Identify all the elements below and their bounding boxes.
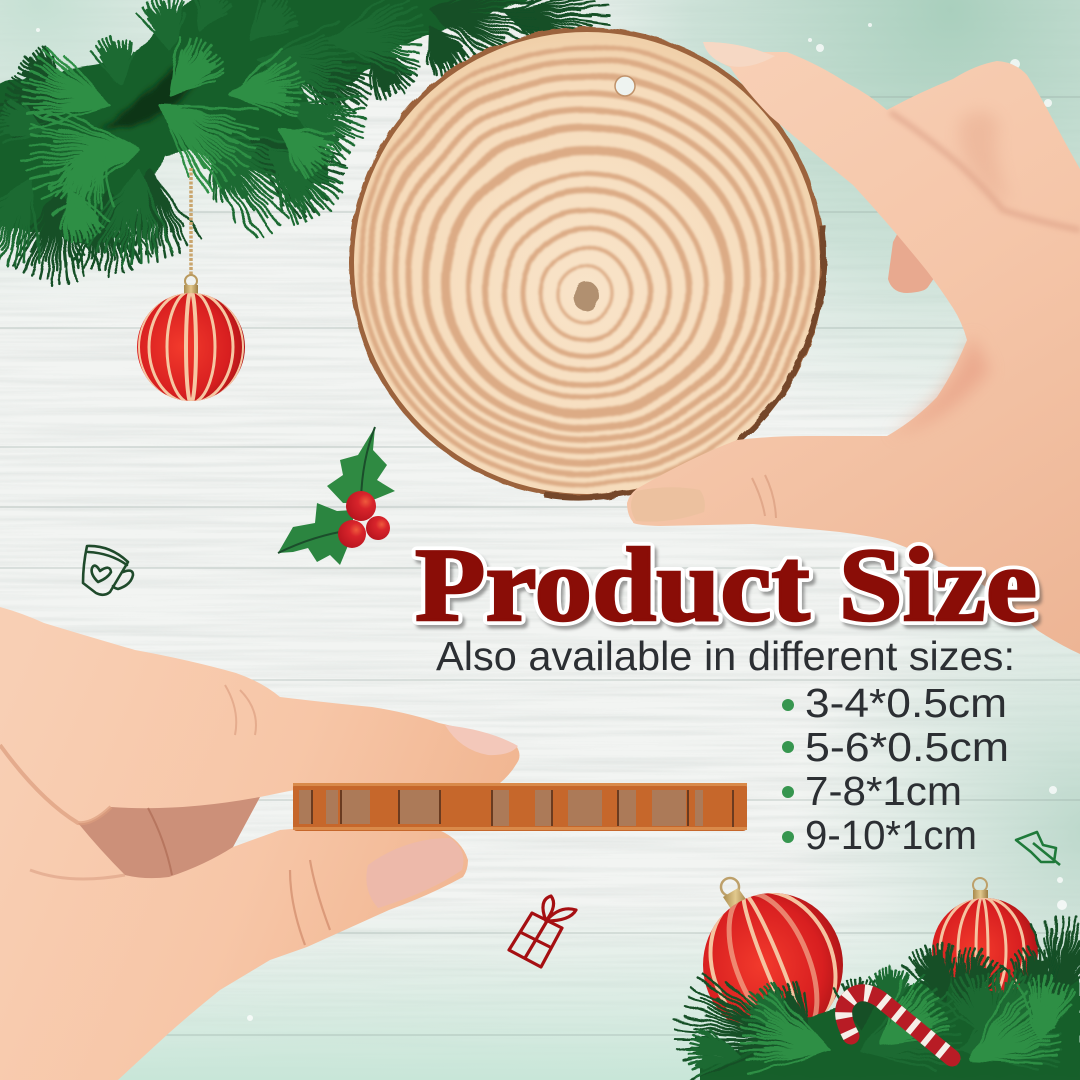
- wood slice ornament: [349, 27, 825, 499]
- pine branch: top left: [0, 0, 621, 291]
- pine branch: bottom right: [663, 906, 1080, 1080]
- icon: holly leaf outline: [1016, 832, 1060, 865]
- icon: gift box outline: [509, 896, 576, 967]
- ornament: small red bauble: [932, 878, 1038, 1005]
- hand: pinching slice from the left: [0, 607, 520, 1080]
- title: Product Size: Product Size: [415, 526, 1037, 643]
- ornament: hanging red bauble with gold chain: [137, 168, 245, 403]
- wood slice edge with bark: [293, 783, 747, 831]
- holly with red berries: [278, 427, 395, 565]
- size list: 7-8*1cm: [805, 768, 962, 814]
- ornament: large red bauble: [703, 876, 843, 1029]
- hand: holding slice from the right: [627, 42, 1080, 654]
- size list: 3-4*0.5cm: [805, 680, 1007, 726]
- icon: coffee mug with heart: [83, 546, 133, 595]
- title: Product Size: Product Size: [418, 530, 1040, 647]
- size list: 9-10*1cm: [805, 812, 977, 858]
- title: Product Size: Product Size: [415, 526, 1037, 643]
- size list: [782, 680, 1009, 858]
- candy cane: [844, 993, 952, 1058]
- subtitle: Also available in different sizes:: [436, 633, 1015, 679]
- hanging hole: [615, 76, 635, 96]
- size list: 5-6*0.5cm: [805, 724, 1009, 770]
